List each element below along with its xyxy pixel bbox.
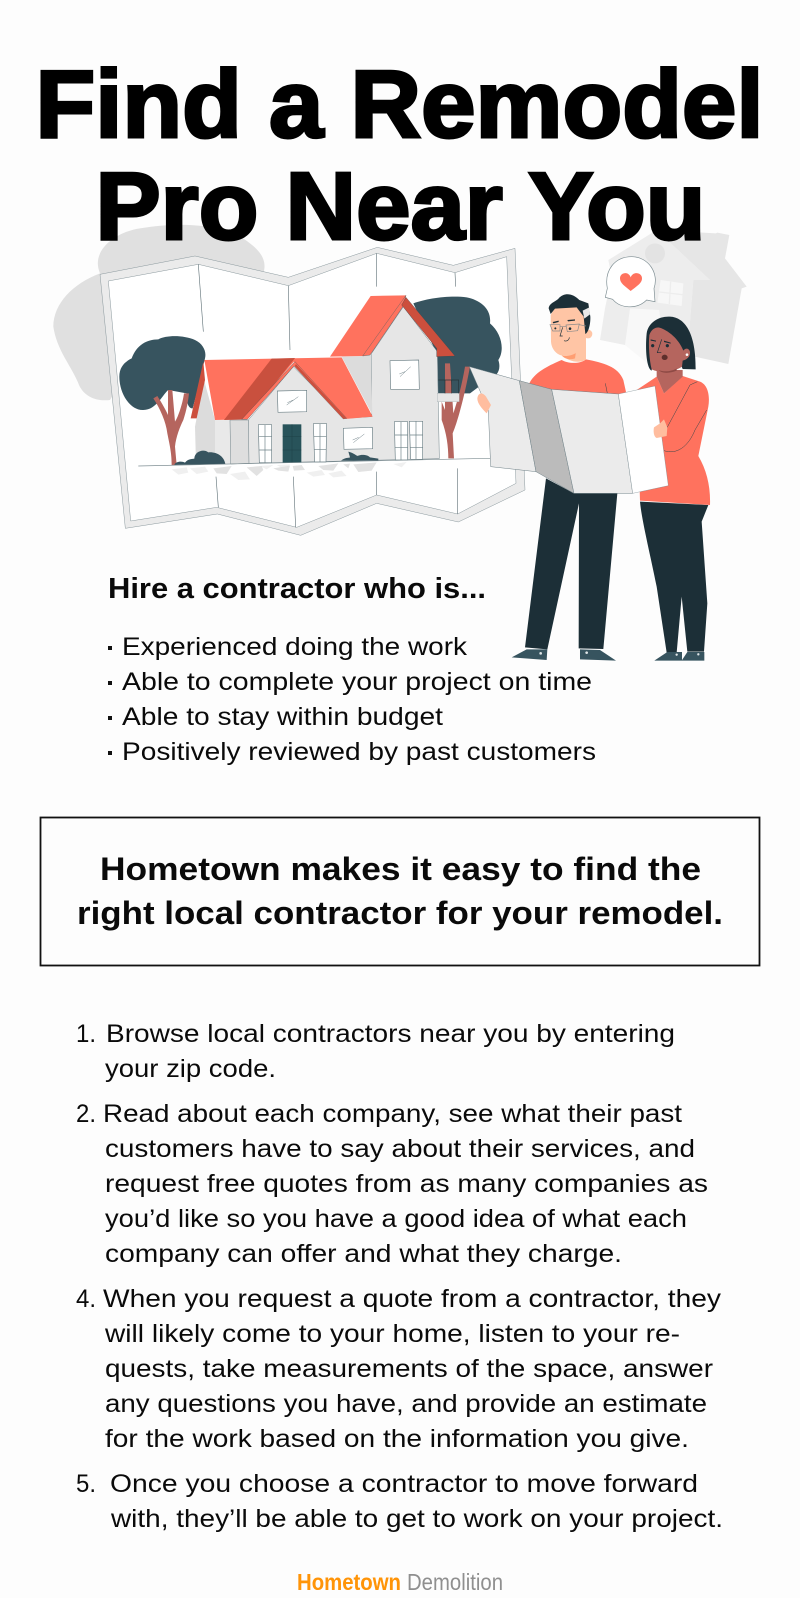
step 4: When you request a quote from a contractor, they: [103, 1285, 722, 1313]
man face details: [553, 319, 575, 330]
man hair: [549, 294, 590, 334]
woman shoes: [654, 652, 704, 661]
step 2: you’d like so you have a good idea of what each: [105, 1205, 687, 1233]
bullet list: Experienced doing the work: [122, 633, 468, 661]
step 1: 1.: [76, 1020, 96, 1048]
woman hair: [646, 317, 696, 371]
house: [191, 295, 459, 464]
paving stones: [172, 462, 407, 480]
bullet list: Positively reviewed by past customers: [122, 738, 596, 766]
woman shirt: [637, 376, 710, 505]
heading: hire a contractor: Hire a contractor who is...: [108, 573, 486, 605]
bushes: [174, 451, 378, 465]
man shirt: [529, 359, 627, 395]
hands: [477, 393, 667, 438]
callout box: Hometown makes it easy to find the: [100, 851, 701, 887]
speech bubble with heart: [605, 257, 655, 307]
step 4: for the work based on the information you give.: [105, 1425, 689, 1453]
step 5: 5.: [76, 1470, 96, 1498]
step 2: 2.: [76, 1100, 96, 1128]
step 4: [76, 1285, 722, 1453]
low roof: [191, 357, 373, 420]
woman neck: [657, 370, 683, 393]
woman: [637, 317, 710, 661]
background blob: [53, 225, 265, 400]
title: Pro Near You: [96, 153, 706, 260]
step 2: customers have to say about their services, and: [105, 1135, 695, 1163]
illustration: couple reading a map: [469, 230, 747, 661]
step 1: Browse local contractors near you by entering: [106, 1020, 675, 1048]
step 5: with, they’ll be able to get to work on your project.: [110, 1505, 723, 1533]
right tree: [413, 297, 502, 458]
step 2: company can offer and what they charge.: [105, 1240, 622, 1268]
step 2: Read about each company, see what their past: [103, 1100, 682, 1128]
title: Find a Remodel: [36, 51, 764, 158]
illustration: map and house scene: [53, 225, 525, 535]
left tree: [119, 336, 205, 465]
man trousers: [525, 478, 617, 649]
man: [512, 294, 627, 661]
step 4: will likely come to your home, listen to your re-: [104, 1320, 680, 1348]
step 5: Once you choose a contractor to move forward: [110, 1470, 698, 1498]
callout box: [40, 818, 760, 966]
step 4: 4.: [76, 1285, 96, 1313]
tall roof: [330, 295, 455, 357]
step 1: [76, 1020, 675, 1083]
woman face: [649, 327, 690, 372]
title: [36, 51, 764, 260]
bullet list: Able to stay within budget: [122, 703, 443, 731]
bullet list: [108, 633, 596, 766]
ground line: [138, 458, 490, 466]
bullet list: Able to complete your project on time: [122, 668, 592, 696]
step 2: [76, 1100, 708, 1268]
footer logo: [297, 1569, 503, 1595]
footer logo: Hometown: [297, 1569, 401, 1595]
footer logo: Demolition: [407, 1569, 503, 1595]
step 5: [76, 1470, 723, 1533]
icon: heart: [620, 273, 642, 291]
house windows and door: [258, 360, 423, 463]
step 4: quests, take measurements of the space, answer: [105, 1355, 713, 1383]
woman face details: [651, 339, 671, 347]
man head: [551, 303, 592, 362]
man shoes: [512, 649, 616, 661]
background house: [600, 230, 747, 367]
held map: [469, 367, 668, 493]
glasses: [550, 324, 586, 332]
woman trousers: [640, 502, 708, 653]
callout box: right local contractor for your remodel.: [77, 895, 723, 931]
step 2: request free quotes from as many companies as: [105, 1170, 708, 1198]
map sheet: [100, 247, 525, 535]
step 4: any questions you have, and provide an estimate: [105, 1390, 707, 1418]
step 1: your zip code.: [105, 1055, 276, 1083]
